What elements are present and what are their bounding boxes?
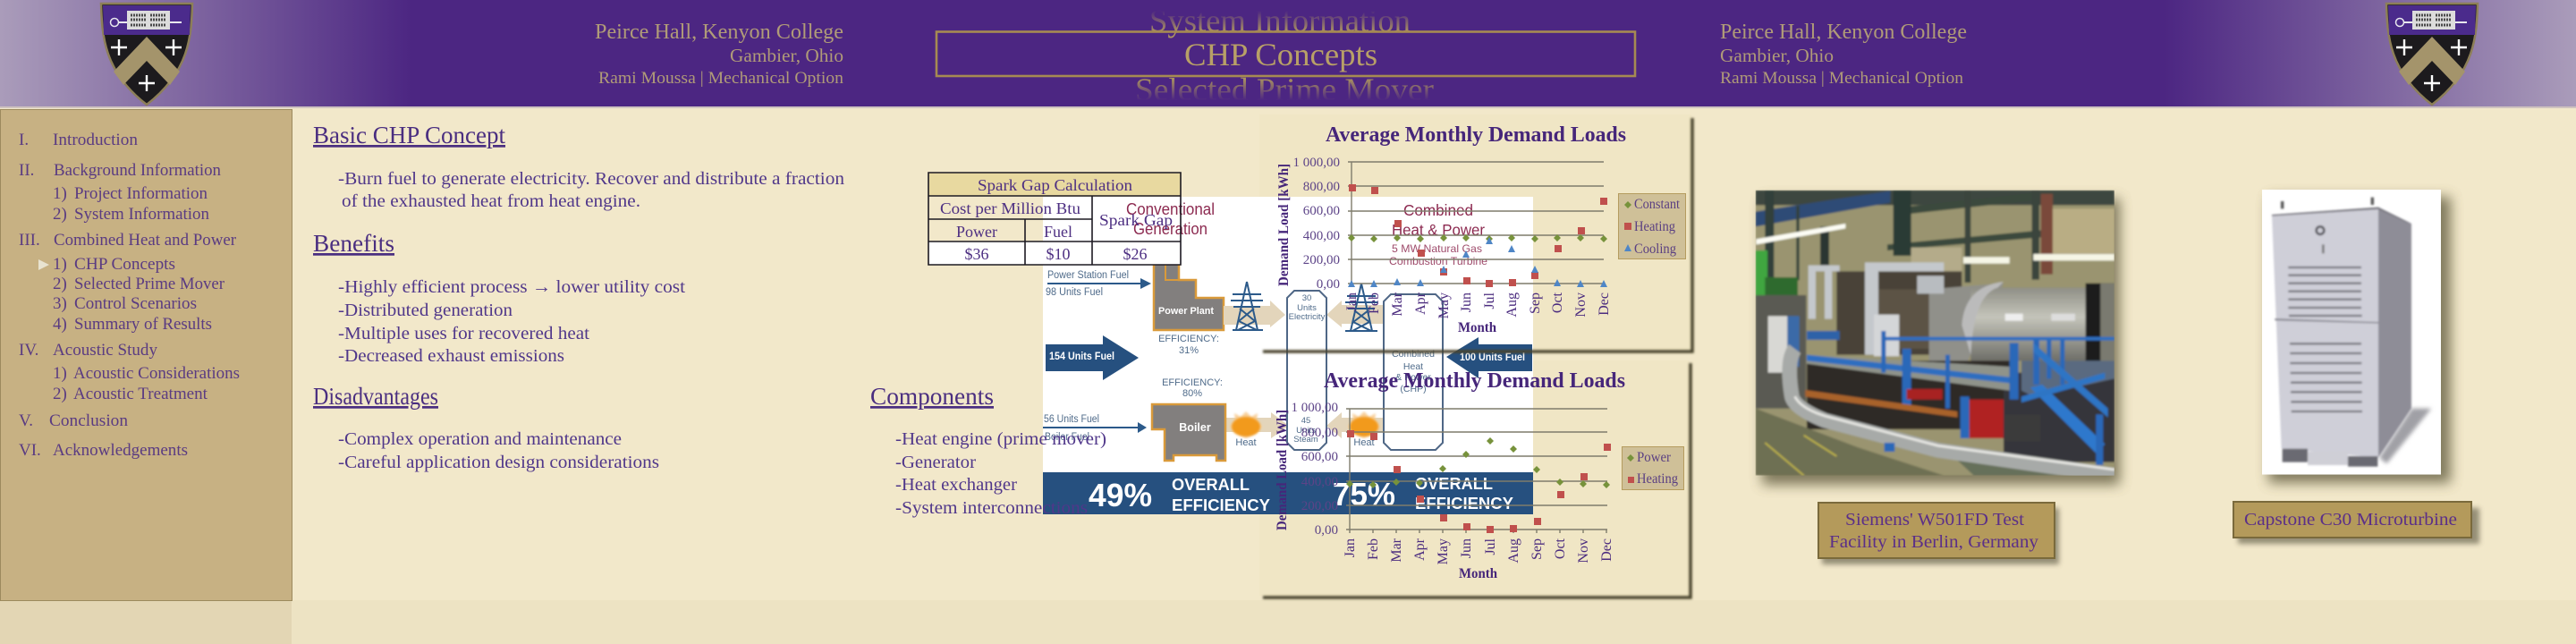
chart: demand loads constant heating cooling: Average Monthly Demand Loads: [1326, 123, 1626, 147]
chart: demand loads power heating: Jul: [1483, 538, 1498, 555]
sidebar navigation panel: Background Information: [54, 161, 221, 180]
electricity and steam box: 30: [1302, 293, 1311, 303]
boiler: [1152, 404, 1225, 461]
chart: demand loads constant heating cooling: 600,00: [1303, 204, 1340, 218]
icon: heat flame right: [1348, 411, 1380, 448]
chart: demand loads constant heating cooling: 400,00: [1303, 229, 1340, 243]
header text right: Gambier, Ohio: [1720, 45, 1834, 66]
text: basic CHP concept: -Burn fuel to generate electricity. Recover and distribute a fraction: [338, 169, 844, 189]
chart: demand loads constant heating cooling: May: [1436, 292, 1452, 318]
caption: test facility: [1818, 503, 2059, 564]
chart: demand loads power heating: Oct: [1553, 538, 1568, 559]
chart: demand loads power heating: Demand Load [kWh]: [1275, 410, 1290, 530]
chart: demand loads power heating: Sep: [1530, 538, 1545, 560]
text: disadvantages: Disadvantages: [313, 383, 438, 410]
caption: test facility: Facility in Berlin, Germany: [1829, 532, 2038, 552]
bottom strip: [0, 600, 2576, 644]
power plant: Power Plant: [1158, 306, 1214, 317]
chart: demand loads constant heating cooling: 800,00: [1303, 180, 1340, 194]
boiler fuel arrow: 56 Units Fuel: [1044, 414, 1099, 425]
chart: demand loads power heating: May: [1436, 538, 1451, 564]
sidebar navigation panel: Project Information: [74, 184, 208, 203]
49 percent efficiency: EFFICIENCY: [1172, 496, 1270, 514]
icon: heat flame left: Heat: [1235, 437, 1257, 448]
sidebar navigation panel: IV.: [19, 341, 38, 360]
chart: demand loads power heating: [1275, 369, 1683, 581]
sidebar navigation panel: Acoustic Study: [53, 341, 157, 360]
sidebar navigation panel: V.: [19, 411, 33, 430]
sidebar navigation panel: CHP Concepts: [74, 255, 175, 274]
100 units fuel arrow: 100 Units Fuel: [1460, 352, 1525, 363]
sidebar navigation panel: Summary of Results: [74, 315, 212, 334]
chart: demand loads power heating: Mar: [1389, 538, 1404, 563]
photo: Siemens test facility: [1756, 191, 2114, 476]
boiler fuel arrow: Boiler Fuel: [1045, 432, 1089, 443]
caption: microturbine: Capstone C30 Microturbine: [2244, 510, 2457, 530]
CHP unit box: & Power: [1395, 372, 1431, 383]
icon: transmission tower left: [1231, 282, 1263, 330]
chart: demand loads power heating: Apr: [1412, 538, 1428, 561]
sidebar navigation panel: VI.: [19, 441, 41, 460]
sidebar navigation panel: Acknowledgements: [53, 441, 188, 460]
75 percent efficiency: OVERALL: [1415, 475, 1493, 493]
electricity and steam box: Electricity: [1289, 312, 1326, 322]
sidebar navigation panel: III.: [19, 231, 40, 250]
chart: demand loads constant heating cooling: 200,00: [1303, 253, 1340, 267]
electricity and steam box: Units: [1297, 303, 1317, 313]
sidebar navigation panel: II.: [19, 161, 34, 180]
chart: demand loads power heating: 800,00: [1301, 426, 1338, 440]
chart panel shadows: [1263, 118, 1692, 597]
154 units fuel arrow: [1046, 335, 1139, 380]
boiler fuel arrow: [1043, 414, 1147, 443]
header text left: Gambier, Ohio: [730, 45, 843, 66]
chart: demand loads power heating: Aug: [1506, 538, 1521, 564]
power station fuel arrow: 98 Units Fuel: [1046, 287, 1103, 298]
75 percent efficiency: 75%: [1333, 476, 1395, 513]
chart: demand loads power heating: Nov: [1576, 538, 1591, 564]
text: components: -System interconnections: [895, 498, 1088, 518]
text: benefits: [313, 230, 685, 366]
legend: Constant: [1634, 197, 1680, 212]
CHP vs conventional generation diagram: [1043, 197, 1533, 514]
sidebar navigation panel: 1): [53, 364, 67, 383]
sidebar navigation panel: [0, 109, 292, 601]
combined heat and power heading: 5 MW Natural Gas: [1392, 242, 1482, 255]
text: benefits: -Multiple uses for recovered heat: [338, 324, 589, 343]
power station fuel arrow: [1046, 270, 1151, 298]
sidebar navigation panel: 2): [53, 385, 67, 403]
chart: demand loads constant heating cooling: Apr: [1413, 292, 1428, 315]
power station fuel arrow: Power Station Fuel: [1047, 270, 1129, 281]
sidebar navigation panel: Control Scenarios: [74, 294, 197, 313]
sidebar navigation panel: 1): [53, 255, 67, 274]
chart: demand loads constant heating cooling: Jun: [1459, 292, 1474, 312]
combined heat and power heading: Heat & Power: [1392, 221, 1485, 239]
sidebar navigation panel: Combined Heat and Power: [54, 231, 237, 250]
CHP unit box: (CHP): [1400, 384, 1427, 394]
text: components: -Heat engine (prime mover): [895, 429, 1106, 449]
sidebar navigation panel: 4): [53, 315, 67, 334]
chart: demand loads constant heating cooling: 0,00: [1317, 277, 1340, 292]
text: basic CHP concept: [313, 122, 844, 211]
text: disadvantages: [313, 383, 659, 472]
chart: demand loads power heating: 1 000,00: [1292, 401, 1338, 415]
caption: test facility: Siemens' W501FD Test: [1845, 510, 2024, 530]
conventional generation heading: Conventional: [1126, 200, 1215, 218]
text: basic CHP concept: Basic CHP Concept: [313, 122, 505, 148]
text: components: -Heat exchanger: [895, 475, 1017, 495]
chart: demand loads power heating: 600,00: [1301, 450, 1338, 464]
combined heat and power heading: [1389, 201, 1487, 267]
sidebar navigation panel: Conclusion: [49, 411, 129, 430]
table: spark gap calculation: Power: [956, 223, 997, 241]
efficiency labels: 31%: [1179, 345, 1199, 356]
legend: [1623, 447, 1683, 490]
legend: [1619, 193, 1685, 259]
right crest: [2386, 4, 2478, 105]
49 percent efficiency: OVERALL: [1172, 476, 1250, 494]
CHP unit box: Combined: [1392, 349, 1435, 360]
header text left: [595, 21, 844, 88]
combined heat and power heading: Combustion Turbine: [1389, 255, 1487, 267]
text: benefits: -Decreased exhaust emissions: [338, 346, 564, 366]
efficiency band: [1043, 472, 1533, 514]
table: spark gap calculation: $26: [1123, 245, 1147, 263]
conventional generation heading: [1126, 200, 1215, 238]
chart: demand loads power heating: Feb: [1366, 538, 1381, 560]
sidebar navigation panel: 2): [53, 205, 67, 224]
text: disadvantages: -Careful application design considerations: [338, 453, 659, 472]
section title carousel: [936, 3, 1635, 107]
chart: demand loads power heating: Dec: [1599, 538, 1614, 562]
caption: microturbine: [2233, 502, 2479, 544]
photo shadow: microturbine: [2268, 197, 2451, 483]
text: basic CHP concept: of the exhausted heat from heat engine.: [342, 191, 640, 211]
sidebar navigation panel: System Information: [74, 205, 209, 224]
text: benefits: -Distributed generation: [338, 301, 513, 320]
table: spark gap calculation: Cost per Million Btu: [940, 199, 1080, 217]
chart panel backgrounds: [1259, 114, 1691, 596]
sidebar navigation panel: Acoustic Considerations: [73, 364, 240, 383]
chart: demand loads constant heating cooling: Feb: [1367, 292, 1382, 314]
chart: demand loads power heating: Jan: [1343, 538, 1358, 557]
icon: transmission tower right: [1345, 284, 1377, 331]
chart: demand loads constant heating cooling: Demand Load [kWh]: [1276, 164, 1292, 286]
table: spark gap calculation: [928, 173, 1181, 265]
efficiency labels: 80%: [1182, 388, 1202, 399]
chart: demand loads constant heating cooling: Aug: [1504, 292, 1520, 318]
chart: demand loads constant heating cooling: Dec: [1597, 292, 1612, 316]
left crest: [101, 4, 192, 105]
beige electricity arrows: [1224, 301, 1384, 438]
legend: Heating: [1634, 219, 1675, 234]
text: components: Components: [870, 383, 994, 410]
header banner: [0, 0, 2576, 108]
header text right: [1720, 21, 1967, 88]
CHP unit box: [1384, 294, 1443, 450]
chart: demand loads constant heating cooling: [1276, 123, 1685, 335]
icon: heat flame right: Heat: [1353, 437, 1375, 448]
chart: demand loads power heating: 200,00: [1301, 499, 1338, 513]
legend: Cooling: [1634, 242, 1676, 257]
efficiency labels: EFFICIENCY:: [1162, 377, 1223, 388]
100 units fuel arrow: [1446, 337, 1532, 378]
sidebar navigation panel: Introduction: [53, 131, 138, 149]
section title carousel: Selected Prime Mover: [1135, 72, 1434, 107]
chart: demand loads constant heating cooling: 1 000,00: [1293, 156, 1340, 170]
text: disadvantages: -Complex operation and maintenance: [338, 429, 622, 449]
header text left: Rami Moussa | Mechanical Option: [598, 69, 844, 88]
electricity and steam box: Units: [1296, 426, 1316, 436]
CHP unit box: Heat: [1403, 361, 1423, 372]
sidebar navigation panel: 3): [53, 294, 67, 313]
sidebar navigation panel: I.: [19, 131, 29, 149]
photo shadow: test facility: [1762, 199, 2120, 485]
75 percent efficiency: [1333, 475, 1513, 513]
series: power: [1346, 437, 1610, 488]
section title carousel: CHP Concepts: [1184, 37, 1377, 72]
header text right: Peirce Hall, Kenyon College: [1720, 21, 1967, 44]
boiler: Boiler: [1179, 421, 1211, 434]
154 units fuel arrow: 154 Units Fuel: [1049, 352, 1114, 362]
chart: demand loads constant heating cooling: Jan: [1344, 292, 1360, 311]
text: components: [870, 383, 1106, 518]
legend: Heating: [1637, 471, 1678, 487]
sidebar navigation panel: Acoustic Treatment: [73, 385, 208, 403]
chart: demand loads constant heating cooling: Mar: [1390, 292, 1405, 317]
combined heat and power heading: Combined: [1403, 201, 1473, 219]
electricity and steam box: [1287, 291, 1326, 450]
header text right: Rami Moussa | Mechanical Option: [1720, 69, 1964, 88]
sidebar navigation panel: 1): [53, 184, 67, 203]
series: cooling: [1348, 237, 1607, 287]
chart: demand loads power heating: Jun: [1459, 538, 1474, 558]
chart: demand loads constant heating cooling: Sep: [1528, 292, 1543, 314]
efficiency labels: EFFICIENCY:: [1158, 334, 1219, 344]
chart: demand loads power heating: 400,00: [1301, 475, 1338, 489]
text: benefits: -Highly efficient process → lower utility cost: [338, 277, 685, 297]
chart: demand loads constant heating cooling: Oct: [1550, 292, 1565, 313]
chart: demand loads power heating: Month: [1459, 566, 1497, 581]
current section marker: [38, 259, 49, 270]
table: spark gap calculation: Spark Gap: [1099, 211, 1173, 229]
table: spark gap calculation: $10: [1046, 245, 1070, 263]
chart: demand loads constant heating cooling: Jul: [1482, 292, 1497, 309]
75 percent efficiency: EFFICIENCY: [1415, 495, 1513, 513]
series: constant: [1348, 234, 1607, 242]
chart: demand loads power heating: Average Monthly Demand Loads: [1324, 369, 1625, 393]
49 percent efficiency: [1089, 476, 1270, 514]
49 percent efficiency: 49%: [1089, 477, 1152, 513]
table: spark gap calculation: Fuel: [1044, 223, 1072, 241]
table: spark gap calculation: $36: [964, 245, 989, 263]
section title carousel: System Information: [1149, 3, 1411, 38]
chart: demand loads constant heating cooling: Month: [1458, 320, 1496, 335]
photo: Capstone microturbine: [2262, 190, 2441, 475]
table: spark gap calculation: Spark Gap Calculation: [978, 176, 1132, 194]
legend: Power: [1637, 450, 1672, 465]
electricity and steam box: Steam: [1293, 435, 1318, 445]
icon: heat flame left: [1230, 411, 1262, 448]
sidebar navigation panel: 2): [53, 275, 67, 293]
conventional generation heading: Generation: [1133, 220, 1208, 238]
text: benefits: Benefits: [313, 230, 394, 257]
chart: demand loads power heating: 0,00: [1315, 523, 1338, 538]
efficiency labels: [1158, 334, 1223, 399]
electricity and steam box: 45: [1301, 416, 1310, 426]
series: heating: [1347, 430, 1611, 533]
chart: demand loads constant heating cooling: Nov: [1573, 292, 1589, 318]
series: heating: [1349, 184, 1607, 287]
text: components: -Generator: [895, 453, 976, 472]
sidebar navigation panel: Selected Prime Mover: [74, 275, 225, 293]
power plant: [1154, 243, 1224, 330]
header text left: Peirce Hall, Kenyon College: [595, 21, 843, 44]
